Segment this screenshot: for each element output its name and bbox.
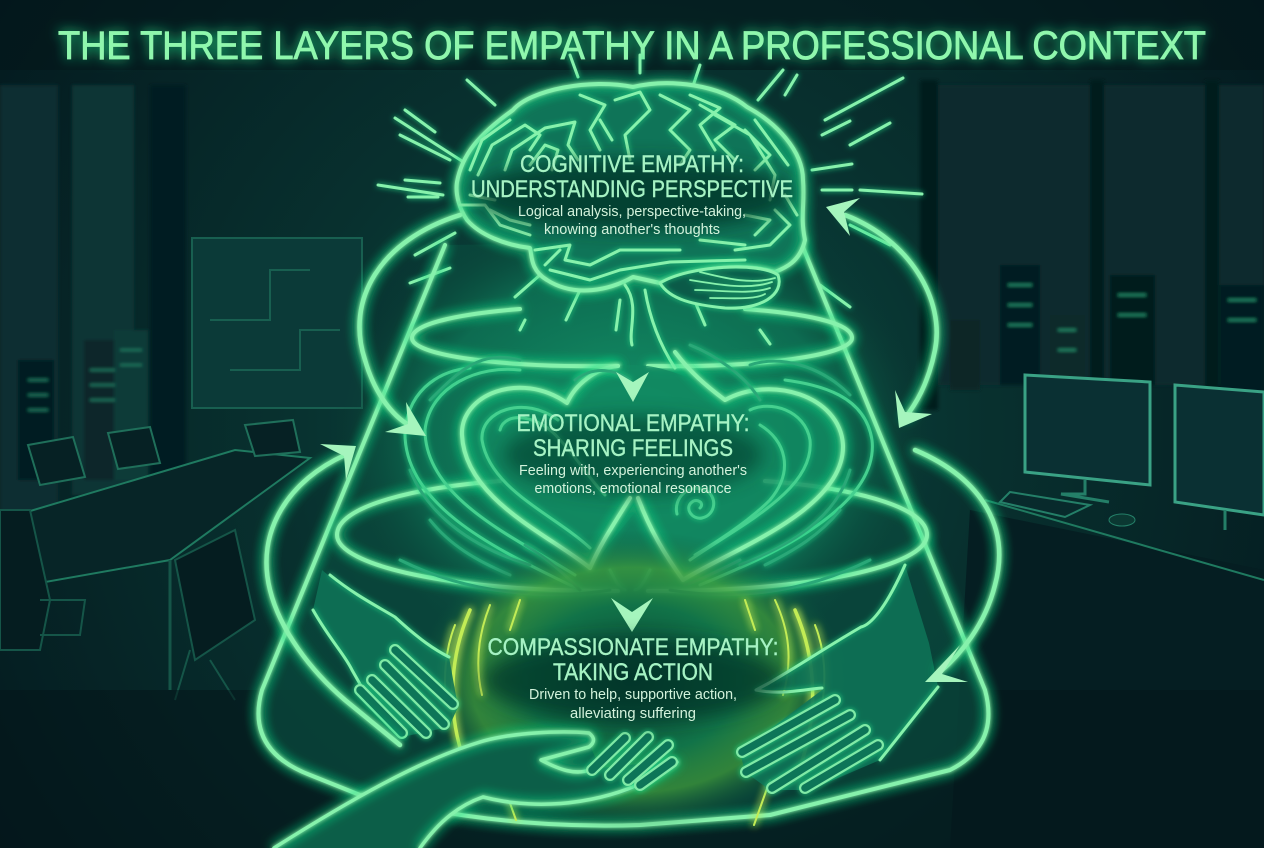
cycle arrow: lower right [915,450,999,682]
icon: left hand [313,570,458,737]
label: emotional empathy: emotions, emotional resonance [534,481,732,497]
label: emotional empathy [503,410,763,497]
office windows left [0,85,186,515]
city through right windows [920,80,1264,410]
label: emotional empathy: SHARING FEELINGS [533,435,733,462]
pyramid interior fill [258,240,988,826]
center glow [332,200,932,680]
conference table and chairs [0,420,310,700]
pyramid frame [258,240,988,826]
label: compassionate empathy: COMPASSIONATE EMPATHY: [488,634,778,661]
label: cognitive empathy [471,151,793,238]
layer rings [337,309,927,591]
label: cognitive empathy: UNDERSTANDING PERSPECTIVE [471,176,793,203]
heart swirls [400,345,870,595]
label: compassionate empathy: alleviating suffering [570,706,696,722]
label: emotional empathy: Feeling with, experiencing another's [519,463,747,479]
cycle arrow: lower left [267,444,400,745]
label: compassionate empathy: Driven to help, supportive action, [529,687,737,703]
icon: heart [405,352,872,590]
yellow-green swirl [417,530,847,830]
label: cognitive empathy: Logical analysis, perspective-taking, [518,204,746,220]
icon: brain [457,83,805,290]
radiating light rays [378,55,922,344]
cycle arrow: upper left [359,215,460,436]
label: cognitive empathy: knowing another's thoughts [544,222,720,238]
brain stem and cerebellum [625,267,779,368]
label: emotional empathy: EMOTIONAL EMPATHY: [516,410,750,437]
desk and monitors [950,375,1264,848]
center flow arrows [611,305,653,632]
whiteboard [192,238,362,408]
cycle arrow: upper right [826,198,937,428]
label: compassionate empathy: TAKING ACTION [553,659,713,686]
label: compassionate empathy [483,634,783,722]
label: cognitive empathy: COGNITIVE EMPATHY: [520,151,744,178]
icon: bottom open hand [274,732,677,848]
icon: right hand [740,565,938,790]
